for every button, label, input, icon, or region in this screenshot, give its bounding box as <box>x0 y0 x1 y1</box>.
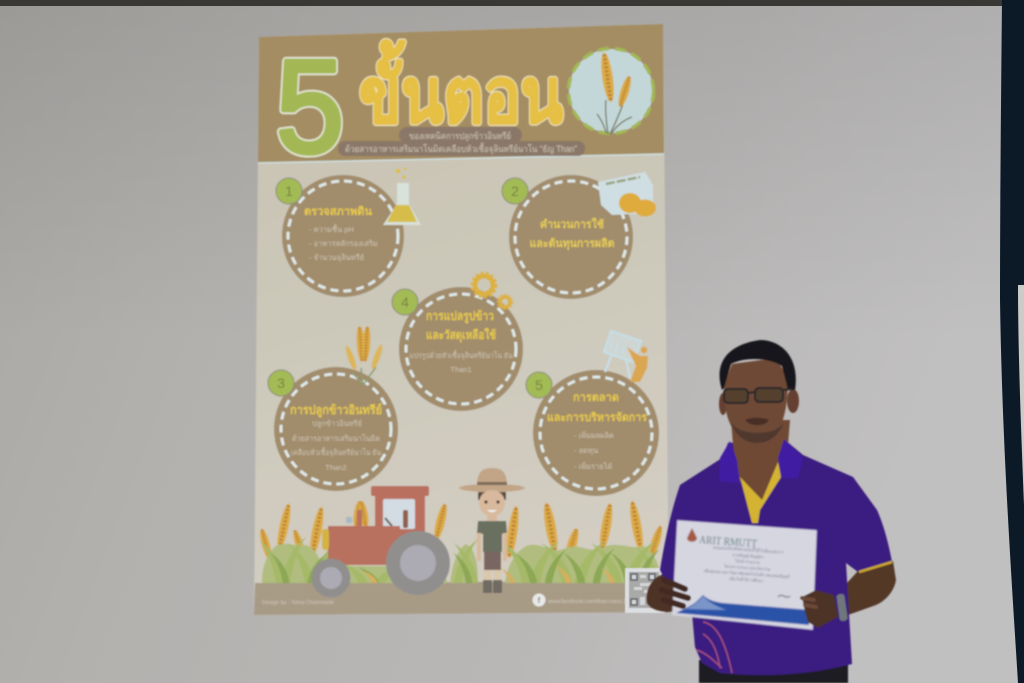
watch <box>836 594 848 621</box>
right wall strip <box>1018 285 1024 505</box>
step 2 panel <box>502 172 656 299</box>
certificate text: เมื่อวันที่ ปีการศึกษา <box>729 576 764 583</box>
foliage base mass <box>262 544 662 583</box>
step 5 list: - ลดทุน <box>574 446 598 455</box>
step 5 heading: และการบริหารจัดการ <box>547 411 647 424</box>
trousers <box>699 660 848 683</box>
left hand base <box>647 574 690 612</box>
certificate text: นายธัญญ์ ธัญญ์ธร <box>732 552 765 559</box>
step 3 badge: 3 <box>277 375 285 391</box>
shirt collar <box>719 439 803 483</box>
icon: gears <box>472 272 512 310</box>
certificate logo <box>687 528 697 542</box>
right sleeve hem <box>859 562 892 572</box>
step 3 body: เคลือบหัวเชื้อจุลินทรีย์นาโน ธัน <box>291 447 381 457</box>
shirt graphic <box>697 622 732 673</box>
step 1 panel <box>276 168 421 297</box>
step 1 list: - อาหารหลักรองเสริม <box>309 239 378 248</box>
emblem: rice <box>568 48 654 134</box>
step 4 heading: การแปลรูปข้าว <box>426 309 494 324</box>
step 3 body: ด้วยสารอาหารเสริมนาโนมิต <box>292 434 380 443</box>
tractor <box>312 486 450 598</box>
certificate wave <box>676 595 810 625</box>
subtitle pill 1: ของเทคนิคการปลูกข้าวอินทรีย์ <box>409 130 511 142</box>
step 5 badge: 5 <box>535 377 543 393</box>
subtitle pill 2: ด้วยสารอาหารเสริมนาโนมิตเคลือบหัวเชื้อจุลินทรีย์นาโน “ธัญ Than” <box>345 142 577 155</box>
projected poster <box>254 24 669 615</box>
icon: presenter <box>604 331 648 382</box>
step 5 list: - เพิ่มผลผลิต <box>574 430 614 440</box>
certificate text: โครงการประกวดนวัตกรรม <box>724 564 771 572</box>
step 2 heading <box>530 217 614 251</box>
step 3 body <box>291 419 381 472</box>
step 5 list <box>574 430 614 471</box>
step 1 badge <box>276 178 302 204</box>
step 1 heading: ตรวจสภาพดิน <box>304 205 372 218</box>
head <box>719 340 799 443</box>
step 3 heading: การปลูกข้าวอินทรีย์ <box>290 403 382 418</box>
person <box>647 340 896 683</box>
step 5 heading: การตลาด <box>573 392 619 404</box>
step 4 heading: และวัสดุเหลือใช้ <box>426 327 496 343</box>
step 2 heading: และต้นทุนการผลิต <box>530 237 614 251</box>
icon: money and coins <box>598 172 656 216</box>
subtitle pill 1 <box>399 127 522 143</box>
step 5 panel <box>526 331 659 496</box>
crops row <box>258 500 665 583</box>
certificate signature <box>778 595 790 597</box>
footer credit: Design by : Yotsa Chamnanki <box>262 600 334 606</box>
icon: rice ears <box>344 326 384 385</box>
step 3 panel <box>268 326 398 491</box>
left fingers <box>662 580 688 606</box>
step 1 list: - จำนวนจุลินทรีย์ <box>309 253 364 262</box>
step 3 body: Than2 <box>325 463 347 472</box>
step 1 list <box>309 224 378 262</box>
neck <box>731 420 790 502</box>
step 4 body <box>410 350 512 374</box>
step 1 list: - ความชื้น pH <box>309 224 354 234</box>
step 4 panel <box>392 272 523 411</box>
big number 5: 5 <box>276 33 344 180</box>
step 5 heading <box>547 392 647 424</box>
certificate text: ขอมอบเกียรติบัตรฉบับนี้ให้ไว้เพื่อแสดงว่า <box>713 543 784 555</box>
poster background <box>254 24 669 615</box>
subtitle pill 2 <box>338 141 585 156</box>
step 4 body: แปรรูปด้วยหัวเชื้อจุลินทรีย์นาโน ธัน <box>410 350 512 360</box>
certificate text: ได้เข้าร่วมงาน <box>734 558 760 565</box>
step 2 badge: 2 <box>511 183 519 199</box>
certificate text: เพื่อชุมชน มหาวิทยาลัยเทคโนโลยีราชมงคลธัญบุรี <box>704 568 791 580</box>
ceiling band <box>0 0 1002 6</box>
right forearm <box>832 561 896 617</box>
header band <box>258 24 664 180</box>
icon: flask <box>383 168 421 225</box>
shirt <box>660 440 892 675</box>
certificate <box>672 520 817 630</box>
farmer <box>459 468 525 593</box>
footer facebook link: www.facebook.com/than.nano.10 <box>547 599 629 605</box>
right fingers <box>802 598 816 607</box>
QR code <box>625 568 665 613</box>
footer facebook link: f <box>538 596 541 605</box>
step 5 list: - เพิ่มรายได้ <box>574 461 612 471</box>
big number 5: 5 <box>276 33 344 180</box>
right hand <box>802 590 838 628</box>
dark right edge <box>1000 0 1024 683</box>
certificate text <box>703 542 792 585</box>
step 3 body: ปลูกข้าวอินทรีย์ <box>312 419 362 428</box>
step 2 badge <box>502 178 528 204</box>
footer facebook link <box>532 594 629 606</box>
header divider <box>258 154 664 163</box>
step 4 body: Than1 <box>450 365 472 374</box>
step 4 heading <box>426 309 496 343</box>
glasses <box>724 388 792 403</box>
certificate brand: ARIT RMUTT <box>699 534 758 550</box>
title: steps: ขั้นตอน <box>359 40 563 139</box>
yellow placket <box>740 462 781 523</box>
step 2 heading: คำนวนการใช้ <box>540 217 605 231</box>
ground strip <box>254 581 669 615</box>
step 5 badge <box>526 372 552 398</box>
step 4 badge: 4 <box>401 294 409 310</box>
step 1 badge: 1 <box>285 183 293 199</box>
title: steps: ขั้นตอน <box>359 40 563 139</box>
step 3 badge <box>268 370 294 396</box>
